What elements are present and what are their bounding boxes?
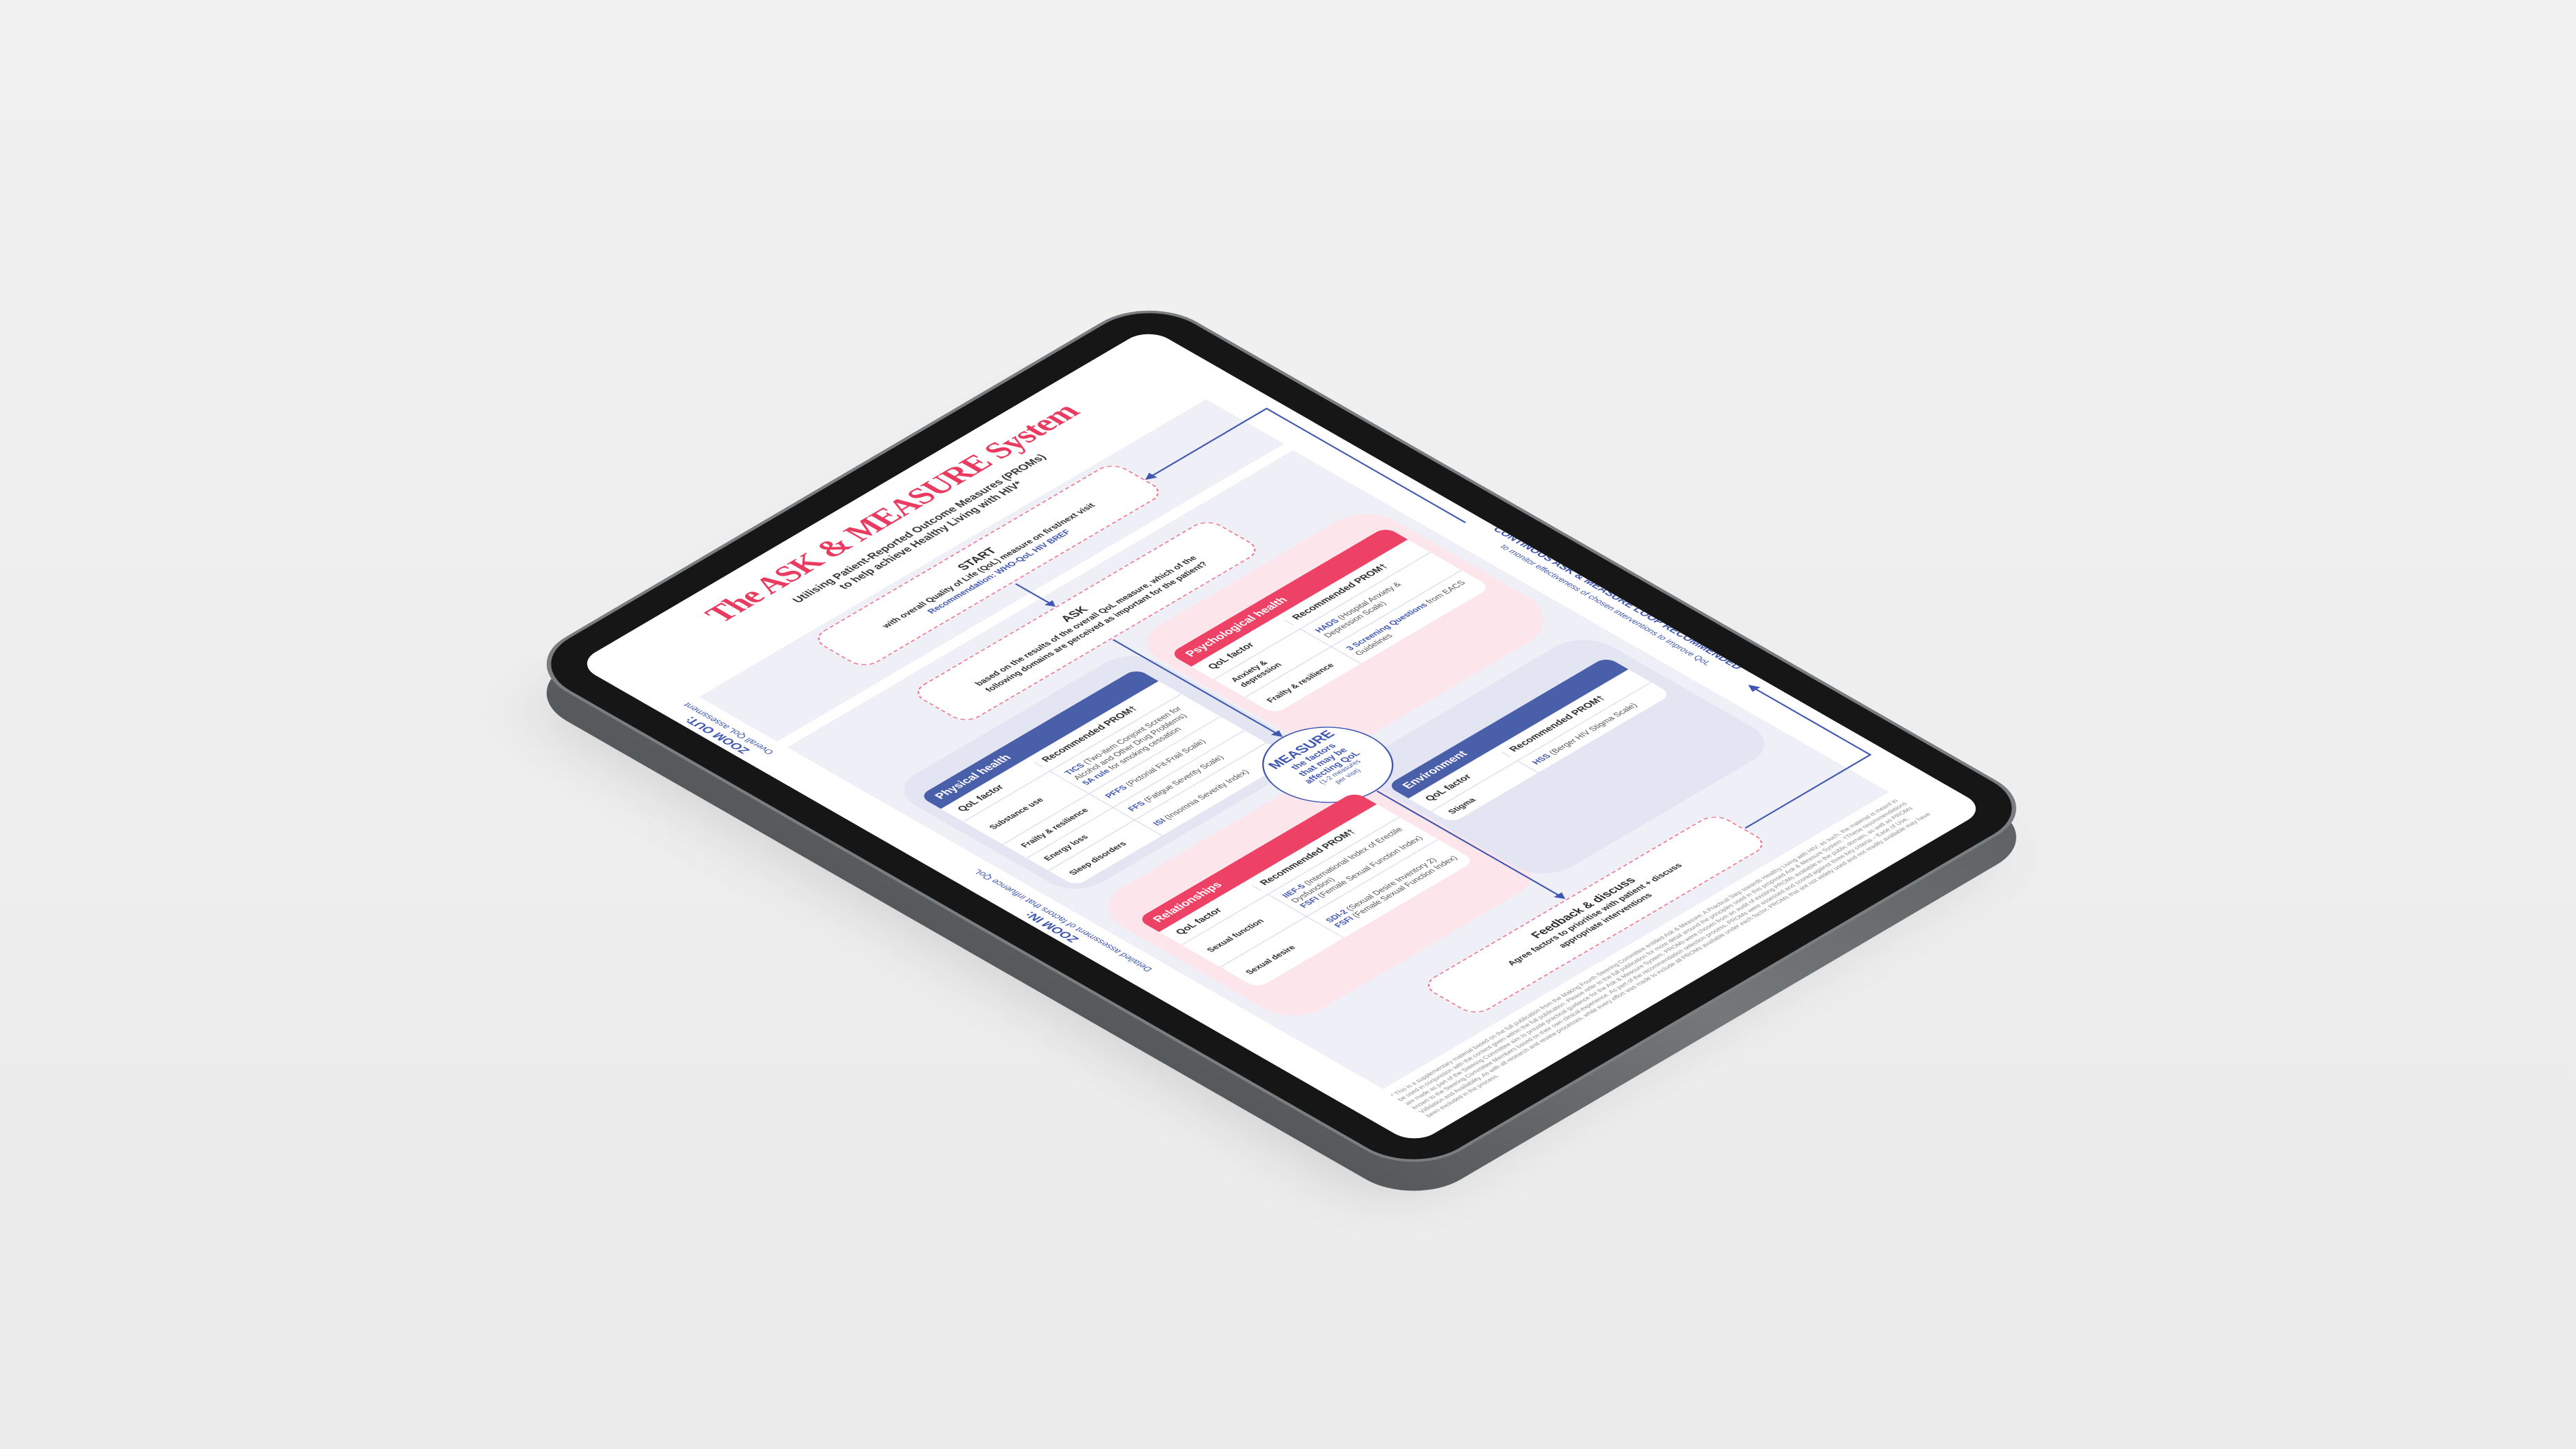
blob: environment xyxy=(1346,630,1781,883)
blob: relationships xyxy=(1088,758,1548,1025)
panel: zoom out xyxy=(699,399,1284,742)
card: physical health: QoL factor xyxy=(955,783,1006,813)
blob: physical xyxy=(889,647,1319,898)
measure circle: (1-2 measures xyxy=(1317,758,1363,785)
card: relationships: FSFI (Female Sexual Function Index) xyxy=(1332,854,1459,929)
card: relationships: SDI-2 (Sexual Desire Inventory 2) xyxy=(1323,856,1439,924)
card: relationships: Recommended PROM† xyxy=(1257,828,1358,886)
card: physical health: ISI (Insomnia Severity Index) xyxy=(1150,768,1251,827)
card: physical health: Energy loss xyxy=(1042,833,1090,862)
measure circle: per visit) xyxy=(1333,767,1363,785)
card: environment xyxy=(1386,656,1672,823)
measure circle xyxy=(1235,711,1421,819)
card: environment: Stigma xyxy=(1446,796,1478,815)
ask box: based on the results of the overall QoL measure, which of the xyxy=(973,554,1199,687)
card: relationships: IIEF-5 (International Index of Erectile Dysfunction) xyxy=(1280,826,1405,904)
card: relationships: FSFI (Female Sexual Function Index) xyxy=(1297,835,1425,909)
subtitle: Utilising Patient-Reported Outcome Measures (PROMs) xyxy=(790,453,1049,605)
loop label: to monitor effectiveness of chosen interventions to improve QoL xyxy=(1498,543,1713,667)
start box xyxy=(810,461,1167,670)
card: psychological health: 3 Screening Questions from EACS Guidelines xyxy=(1344,579,1468,657)
label: zoom in: Detailed assessment of factors that influence QoL xyxy=(971,868,1155,973)
card: physical health xyxy=(919,668,1293,886)
card: environment: Recommended PROM† xyxy=(1507,694,1608,753)
card: relationships: Sexual desire xyxy=(1244,944,1298,975)
feedback box: Feedback & discuss xyxy=(1528,875,1639,940)
subtitle: to help achieve Healthy Living with HIV* xyxy=(836,480,1026,591)
tablet metal side xyxy=(547,678,2016,1191)
card: physical health: Physical health xyxy=(932,753,1014,801)
measure circle: MEASURE xyxy=(1265,729,1339,771)
card: physical health: Substance use xyxy=(986,796,1046,831)
feedback box: appropriate interventions xyxy=(1556,891,1654,949)
label: zoom out: ZOOM OUT: xyxy=(682,715,753,756)
measure circle: that may be xyxy=(1295,746,1350,778)
card: relationships: Relationships xyxy=(1150,880,1225,924)
card: physical health: FFS (Fatigue Severity Scale) xyxy=(1126,753,1226,813)
feedback box: Agree factors to prioritise with patient + discuss xyxy=(1505,862,1685,967)
label: zoom in: ZOOM IN: xyxy=(1022,910,1082,944)
panel: zoom in xyxy=(787,450,1889,1089)
screen: infographic page xyxy=(576,327,1987,1145)
loop label: CONTINOUS ASK & MEASURE LOOP RECOMMENDED xyxy=(1490,525,1745,671)
ask box: ASK xyxy=(1057,605,1091,624)
card: psychological health: HADS (Hospital Anxiety & Depression Scale) xyxy=(1313,581,1403,639)
card: relationships: QoL factor xyxy=(1173,906,1224,936)
card: environment: Environment xyxy=(1399,749,1470,791)
card: physical health: Sleep disorders xyxy=(1066,840,1128,876)
label: zoom out: Overall QoL assessment xyxy=(681,701,776,756)
blob: psychological xyxy=(1130,504,1567,758)
ask box: following domains are perceived as important for the patient? xyxy=(983,560,1210,693)
title: The ASK & MEASURE System xyxy=(697,398,1087,627)
card: environment: HSS (Berger HIV Stigma Scale) xyxy=(1530,702,1639,766)
card: physical health: TICS (Two-item Conjoint Screen for Alcohol and Other Drug Problems) xyxy=(1062,705,1188,781)
measure circle: affecting QoL xyxy=(1301,749,1363,785)
tablet rim and bezel xyxy=(547,310,2016,1162)
start box: START xyxy=(954,546,1000,572)
card: psychological health xyxy=(1169,527,1491,714)
card: physical health: Frailty & resilience xyxy=(1018,807,1091,849)
start box: with overall Quality of Life (QoL) measure on first/next visit xyxy=(880,502,1097,629)
card: relationships: Sexual function xyxy=(1205,918,1266,953)
card: physical health: 5A rule for smoking cessation xyxy=(1079,725,1183,786)
footnote: * This is a supplementary material based on the full publication from the Making Fourth Steering Committee entitled Ask & Measure: A Practical Step towards Healthy Living with HIV; as such, the material is meant to be used in conjunction with the content given within the full publication. Please refer to the full publication for more detail around the principles used in this proposed Ask & Measure System. †These recommendations are made as part of the Steering Committee aim to provide practical guidance for the Ask & Measure System. PROMs were chosen from an audit of existing PROMs available in the public domain, as well as PROMs known to the Steering Committee Members based on their own clinical experience. As part of the recommendation selection process, PROMs were assessed and scored against three key criteria – Ease of Use, Validation and Availability. As with all research and review processes, while every effort was made to include all PROMs available under each factor, PROMs that are not widely used and not readily available may have been excluded in the process. xyxy=(1389,798,1932,1118)
tablet shadow xyxy=(542,696,1963,1201)
arrows and loop lines xyxy=(1015,407,1872,899)
card: relationships xyxy=(1137,791,1475,989)
card: physical health: PFFS (Pictorial Fit-Frail Scale) xyxy=(1103,738,1208,799)
card: physical health: Recommended PROM† xyxy=(1039,705,1140,764)
measure circle: the factors xyxy=(1288,742,1339,771)
ask box xyxy=(909,518,1264,724)
start box: Recommendation: WHO-QoL HIV BREF xyxy=(925,528,1073,615)
card: environment: QoL factor xyxy=(1423,773,1474,802)
card: psychological health: Recommended PROM† xyxy=(1290,563,1390,621)
card: psychological health: Frailty & resilience xyxy=(1264,662,1336,704)
feedback box xyxy=(1420,812,1771,1017)
card: psychological health: Psychological health xyxy=(1182,595,1290,658)
card: psychological health: Anxiety & depression xyxy=(1228,659,1284,689)
card: psychological health: QoL factor xyxy=(1206,641,1257,671)
